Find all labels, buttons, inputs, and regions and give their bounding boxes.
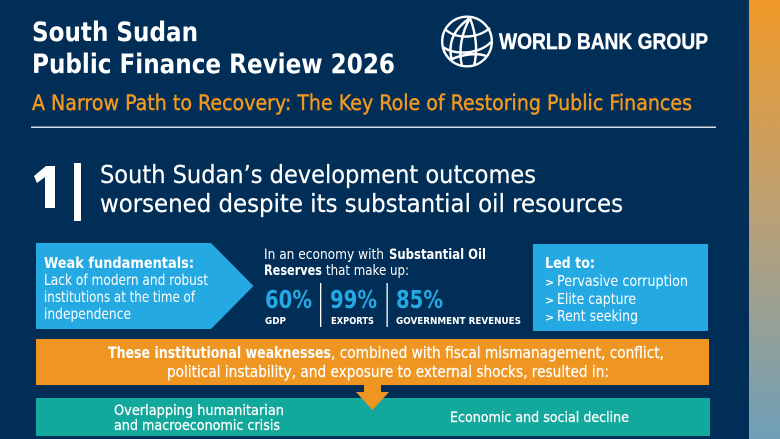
text: economy intro	[264, 247, 486, 279]
panel: weak fundamentals arrow: Lack of modern and robust	[44, 271, 208, 289]
text: economy intro: Substantial Oil	[389, 247, 486, 263]
title: South Sudan	[32, 17, 198, 48]
logo: World Bank Group	[442, 17, 708, 66]
section heading: South Sudan’s development outcomes	[100, 160, 536, 189]
icon: globe	[442, 17, 492, 66]
panel: institutional weaknesses banner: political instability, and exposure to external shocks, resulted in:	[167, 362, 609, 381]
panel: institutional weaknesses banner	[36, 339, 709, 385]
panel: led to: Led to:	[545, 254, 595, 272]
panel: led to: Pervasive corruption	[557, 272, 688, 290]
panel: outcomes banner: Overlapping humanitarian	[114, 403, 284, 419]
side gradient strip	[749, 0, 780, 439]
stat: 60% GDP: 60%	[265, 285, 312, 314]
stat: 99% exports	[330, 285, 377, 327]
section heading: worsened despite its substantial oil resources	[100, 189, 623, 218]
stat: 85% government revenues	[396, 285, 521, 327]
stat: 85% government revenues: GOVERNMENT REVENUES	[396, 316, 521, 327]
text: economy intro: In an economy with	[264, 247, 384, 263]
panel: led to: >	[545, 311, 554, 324]
subtitle: A Narrow Path to Recovery: The Key Role of Restoring Public Finances	[32, 91, 692, 115]
text: economy intro: that make up:	[326, 263, 409, 279]
panel: institutional weaknesses banner: , combined with fiscal mismanagement, conflict,	[331, 343, 664, 362]
section heading	[100, 160, 623, 218]
title	[32, 17, 395, 80]
stat: 85% government revenues: 85%	[396, 285, 443, 314]
text: economy intro: Reserves	[264, 263, 322, 279]
number divider	[74, 163, 81, 221]
stat: 99% exports: 99%	[330, 285, 377, 314]
panel: outcomes banner: and macroeconomic crisis	[114, 418, 280, 434]
panel: outcomes banner: Economic and social decline	[450, 410, 629, 426]
wordmark: WORLD BANK GROUP	[499, 29, 708, 54]
panel: outcomes banner	[36, 398, 710, 436]
panel: weak fundamentals arrow: institutions at the time of	[44, 288, 195, 306]
panel: weak fundamentals arrow	[36, 243, 254, 329]
arrow: down to outcomes	[356, 385, 389, 410]
panel: weak fundamentals arrow: independence	[44, 305, 131, 323]
header divider	[31, 126, 716, 128]
stat: 99% exports: EXPORTS	[331, 316, 374, 327]
panel: led to: Elite capture	[557, 290, 636, 308]
panel: institutional weaknesses banner: These institutional weaknesses	[108, 343, 331, 362]
section number: 1	[31, 154, 69, 230]
title: Public Finance Review 2026	[32, 49, 395, 80]
stat: 60% GDP: GDP	[265, 316, 286, 327]
panel: led to: Rent seeking	[557, 307, 638, 325]
panel: led to	[533, 244, 708, 331]
panel: led to: >	[545, 276, 554, 289]
panel: weak fundamentals arrow: Weak fundamentals:	[44, 254, 194, 272]
stat: 60% GDP	[265, 285, 312, 327]
panel: led to: >	[545, 294, 554, 307]
